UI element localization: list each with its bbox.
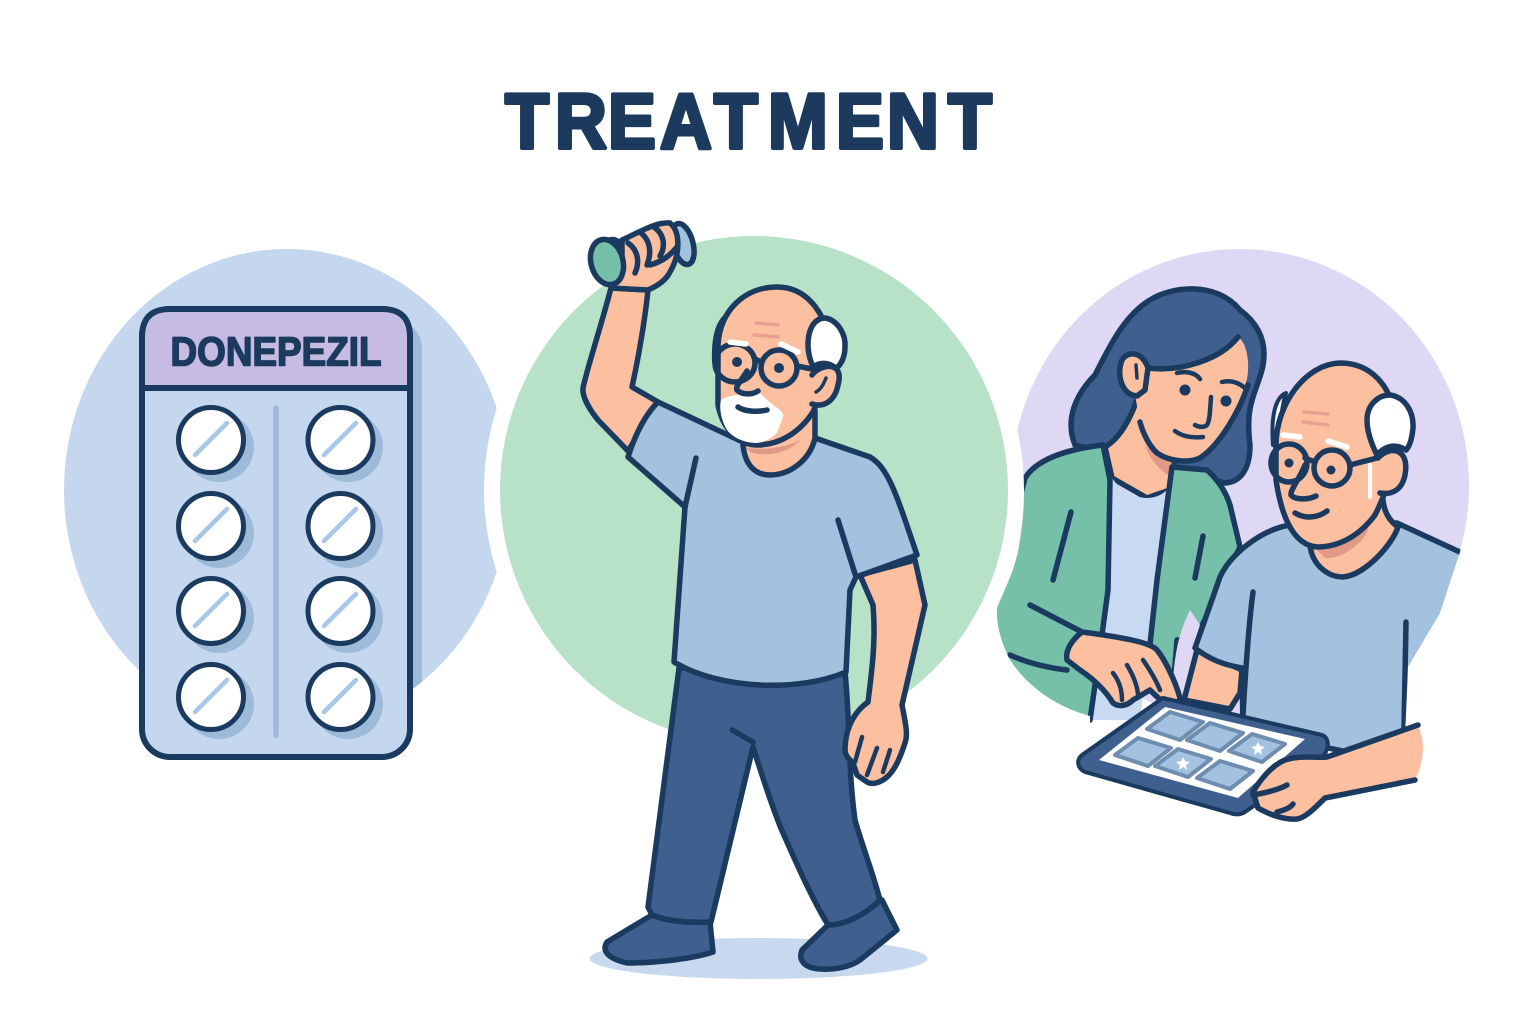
- beard: [720, 393, 783, 443]
- background circle: green: [500, 236, 1008, 744]
- man's neck: [1310, 500, 1398, 577]
- dumbbell and fist: [586, 221, 698, 290]
- shoes: [605, 900, 897, 969]
- tablet: [1078, 698, 1328, 814]
- tablet screen: [1099, 707, 1305, 798]
- head: [714, 287, 845, 445]
- ground shadow: [590, 938, 928, 979]
- eyes: [732, 357, 742, 367]
- woman's face: [1120, 337, 1248, 461]
- panel: caregiver and patient using tablet: [990, 289, 1480, 819]
- background circle: blue: [64, 249, 510, 731]
- panel: donepezil blister pack: [142, 309, 422, 757]
- title: TREATMENT: [505, 77, 992, 165]
- undershirt: [1090, 478, 1168, 720]
- glasses: [1271, 444, 1377, 486]
- man's t-shirt: [1192, 520, 1461, 752]
- man's head: [1271, 363, 1413, 547]
- woman's pointing hand: [1067, 632, 1180, 706]
- app tiles: [1115, 712, 1285, 789]
- man's forearm: [1184, 650, 1242, 709]
- pills: [178, 408, 383, 739]
- figure: older man exercising with dumbbell: [583, 221, 925, 969]
- background circle: purple: [1011, 249, 1469, 721]
- raised arm: [583, 288, 658, 451]
- white hair: [1367, 395, 1413, 455]
- blister pack body: [142, 309, 410, 757]
- cardigan: [990, 445, 1240, 720]
- neck: [743, 410, 815, 475]
- ear: [812, 366, 839, 405]
- lowered arm and hand: [845, 560, 925, 783]
- white hair: [808, 318, 845, 368]
- man's hand holding tablet: [1253, 725, 1423, 819]
- woman's neck: [1105, 397, 1175, 498]
- gap showing background: [1174, 610, 1200, 680]
- perforation line: [273, 408, 279, 735]
- t-shirt: [628, 402, 917, 685]
- white ring: [484, 220, 1024, 760]
- blister pack shadow: [412, 326, 422, 689]
- glasses: [715, 344, 812, 386]
- drug name label: DONEPEZIL: [171, 330, 381, 375]
- woman's hair: [1071, 289, 1264, 483]
- blister header band: [142, 309, 410, 388]
- trousers: [648, 668, 880, 925]
